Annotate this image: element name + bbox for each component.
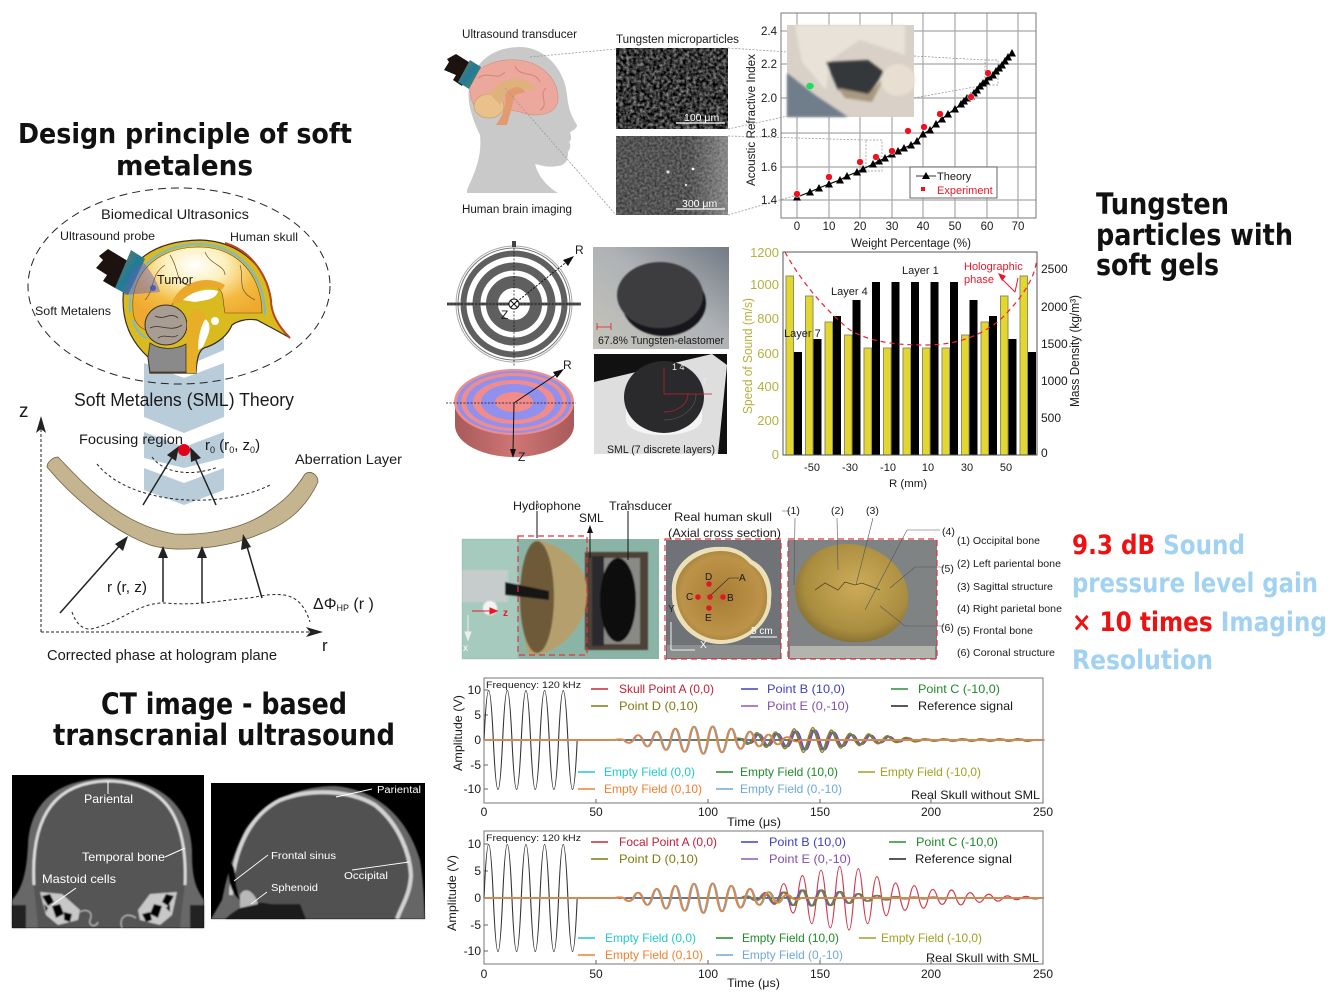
- legend: chart 1: Reference signal: [918, 699, 1013, 713]
- icon: brain: [470, 60, 558, 125]
- labels: lens diagram: HP: [336, 603, 349, 613]
- panel: CT coronal: [12, 775, 204, 928]
- legend: chart 2: Point D (0,10): [619, 852, 698, 866]
- labels: lens diagram: r (r, z): [107, 579, 147, 596]
- leader lines and numbers: (6): [941, 622, 954, 634]
- legend: chart 2: Point E (0,-10): [769, 852, 851, 866]
- axes text: chart 1: -10: [464, 782, 481, 796]
- legend: chart 1: Empty Field (10,0): [740, 765, 838, 779]
- panel: CT coronal: Temporal bone: [82, 850, 165, 864]
- labels: lens diagram: 0: [210, 445, 215, 455]
- list: skull anatomy: (4) Right parietal bone: [957, 603, 1062, 615]
- legend: chart 2: Empty Field (10,0): [742, 931, 839, 945]
- photo inset: [787, 25, 915, 117]
- list: skull anatomy: (5) Frontal bone: [957, 625, 1033, 637]
- panel: head and brain imaging: Human brain imaging: [462, 204, 572, 216]
- layer labels: Holographic: [964, 261, 1023, 273]
- photo: skull axial: X: [700, 640, 707, 651]
- right tick labels: 1500: [1041, 337, 1068, 351]
- layer labels: [784, 261, 1023, 340]
- panel: ring schematic: R: [575, 243, 584, 257]
- panel: CT sagittal: Sphenoid: [271, 883, 318, 894]
- photo: skull axial: D: [705, 572, 712, 583]
- labels: lens diagram: 0: [229, 445, 234, 455]
- chart: skull without SML: [451, 678, 1053, 829]
- labels: brain: Tumor: [157, 272, 194, 287]
- legend: Experiment: [937, 185, 993, 197]
- x tick labels: 30: [961, 462, 973, 474]
- label: real human skull: [668, 510, 781, 540]
- layer labels: Layer 1: [902, 265, 939, 277]
- chart: skull with SML: [445, 831, 1053, 990]
- axes text: chart 1: 250: [1033, 805, 1053, 819]
- layer labels: Layer 7: [784, 328, 821, 340]
- legend: chart 2: Empty Field (-10,0): [881, 931, 982, 945]
- panel: head and brain imaging: [444, 29, 866, 216]
- panel: 3D metalens cylinder: R: [563, 358, 572, 372]
- focal point: [178, 444, 190, 456]
- callout: gain and resolution: 9.3 dB Sound: [1072, 530, 1245, 561]
- x tick labels: [804, 462, 1012, 490]
- title: tungsten particles: [1096, 187, 1293, 282]
- legend: chart 1: Empty Field (0,-10): [740, 782, 842, 796]
- tick labels: 2.2: [761, 59, 777, 71]
- legend: chart 1: Empty Field (0,10): [604, 782, 702, 796]
- axes text: chart 1: 50: [589, 805, 603, 819]
- axes text: chart 1: 10: [468, 683, 481, 697]
- list: skull anatomy: (3) Sagittal structure: [957, 581, 1053, 593]
- arrows to lens: [60, 534, 262, 613]
- photo: tungsten-elastomer: 67.8% Tungsten-elastomer: [598, 335, 724, 347]
- legend: chart 1: Empty Field (0,0): [604, 765, 695, 779]
- legend: chart 1: Point C (-10,0): [918, 682, 1000, 696]
- icon: ultrasound probe: [96, 249, 160, 295]
- dotted zoom boxes: [866, 56, 998, 171]
- leader lines and numbers: (3): [866, 505, 879, 517]
- axes text: chart 2: -5: [470, 918, 481, 932]
- panel: CT sagittal: Occipital: [344, 871, 388, 882]
- axes text: chart 1: 200: [921, 805, 941, 819]
- axes text: chart 1: Time (μs): [727, 815, 781, 829]
- black bars: [794, 282, 1036, 455]
- dashed wavefronts: [72, 457, 310, 629]
- tick labels: 0: [794, 221, 800, 233]
- axis titles: Mass Density (kg/m³): [1067, 295, 1082, 407]
- right tick labels: [1041, 262, 1068, 460]
- labels: lens diagram: Aberration Layer: [295, 451, 402, 467]
- dashed ellipse: [28, 188, 330, 384]
- photo: skull axial: B: [727, 593, 734, 604]
- tick labels: 50: [949, 221, 961, 233]
- legend: chart 1: Skull Point A (0,0): [619, 682, 714, 696]
- title: CT image: transcranial ultrasound: [53, 718, 395, 752]
- photo: skull axial: 5 cm: [751, 626, 773, 637]
- left tick labels: [750, 245, 779, 462]
- axis titles: Weight Percentage (%): [851, 238, 971, 250]
- leader lines and numbers: (1): [787, 505, 800, 517]
- labels: brain: [35, 206, 298, 318]
- legend: chart 1: Real Skull without SML: [911, 788, 1040, 802]
- axes text: chart 2: 100: [698, 967, 718, 981]
- photo: SML 7 layers: 1 4: [672, 362, 685, 372]
- legend: chart 2: Focal Point A (0,0): [619, 835, 717, 849]
- SEM image: 100 um: 100 μm: [684, 112, 719, 124]
- legend: chart 1: Empty Field (-10,0): [880, 765, 981, 779]
- legend: chart 2: Real Skull with SML: [926, 951, 1039, 965]
- callout: gain and resolution: Resolution: [1072, 645, 1213, 676]
- tick labels: 1.8: [761, 128, 777, 140]
- title: CT image: [53, 687, 395, 752]
- callout: gain and resolution: [1072, 530, 1327, 676]
- left tick labels: 800: [757, 311, 779, 326]
- arrow: holographic phase: [998, 273, 1018, 292]
- x tick labels: -50: [804, 462, 820, 474]
- title: CT image: CT image - based: [101, 687, 347, 721]
- tick labels: 70: [1012, 221, 1024, 233]
- photo: experiment setup: x: [463, 643, 468, 654]
- panel: tungsten microparticles: [616, 34, 739, 215]
- chevron arrows: [144, 300, 224, 505]
- chart: speed of sound and density: [740, 245, 1082, 490]
- title: tungsten particles: particles with: [1096, 218, 1293, 252]
- legend: chart 1: Point B (10,0): [767, 682, 845, 696]
- legend: chart 1: Frequency: 120 kHz: [486, 680, 581, 691]
- SEM image: 300 um: [616, 136, 728, 215]
- title: tungsten particles: soft gels: [1096, 248, 1219, 282]
- axes text: chart 2: Time (μs): [727, 976, 780, 990]
- icon: transducer: [444, 54, 481, 89]
- yellow bars: [786, 276, 1028, 455]
- panel: CT coronal: Pariental: [84, 792, 133, 806]
- tick labels: 20: [854, 221, 866, 233]
- photo: SML 7 layers: 7: [702, 377, 707, 387]
- labels: setup arrows: Transducer: [609, 499, 672, 513]
- photo: skull axial: [665, 539, 781, 659]
- experiment series: [794, 70, 991, 197]
- labels: lens diagram: , z: [234, 437, 250, 454]
- axis titles: Speed of Sound (m/s): [740, 298, 755, 414]
- tick labels: 10: [823, 221, 835, 233]
- axes text: chart 2: 250: [1033, 967, 1053, 981]
- arrows to focus: [143, 446, 216, 505]
- layer labels: phase: [964, 274, 994, 286]
- photo: experiment setup: z: [503, 608, 508, 619]
- icon: head silhouette: [467, 47, 577, 193]
- dotted connectors: [505, 48, 866, 215]
- labels: lens diagram: (r: [215, 437, 229, 454]
- tick labels: 1.4: [761, 195, 778, 207]
- axes text: chart 1: 100: [698, 805, 718, 819]
- left tick labels: 1200: [750, 245, 779, 260]
- photo: skull exterior: [788, 539, 937, 659]
- leader lines and numbers: [782, 505, 955, 634]
- leader lines and numbers: (2): [831, 505, 844, 517]
- legend: chart 2: Point B (10,0): [769, 835, 846, 849]
- axes text: chart 2: -10: [464, 944, 481, 958]
- labels: lens diagram: [47, 431, 402, 664]
- tick labels: 40: [917, 221, 929, 233]
- legend: chart 2: Reference signal: [915, 852, 1012, 866]
- legend: Theory: [937, 171, 972, 183]
- holographic phase curve: [785, 252, 1037, 345]
- photo: SML 7 layers: SML (7 discrete layers): [607, 444, 715, 456]
- tick labels: 30: [886, 221, 898, 233]
- reference burst: [484, 690, 577, 790]
- left tick labels: 200: [757, 413, 779, 428]
- right tick labels: 500: [1041, 411, 1061, 425]
- x tick labels: R (mm): [889, 478, 927, 490]
- panel: 3D metalens cylinder: [446, 358, 576, 464]
- axes text: chart 1: 0: [481, 805, 488, 819]
- SEM image: 300 um: 300 μm: [682, 198, 717, 210]
- photo: skull axial: E: [705, 613, 712, 624]
- legend: chart 2: Point C (-10,0): [916, 835, 998, 849]
- panel: 3D metalens cylinder: Z: [518, 450, 525, 464]
- callout: gain and resolution: × 10 times Imaging: [1072, 607, 1327, 638]
- axes text: chart 2: 200: [921, 967, 941, 981]
- axis arrowheads and labels: z: [19, 401, 28, 422]
- axes text: chart 2: 0: [474, 891, 481, 905]
- leader lines and numbers: (5): [941, 563, 954, 575]
- legend: chart 2: Empty Field (0,-10): [742, 948, 843, 962]
- legend: chart 1: [486, 680, 1040, 802]
- ticks: [484, 690, 1043, 803]
- axes text: chart 2: Amplitude (V): [445, 855, 459, 931]
- legend: [910, 167, 997, 198]
- labels: lens diagram: Corrected phase at hologram plane: [47, 648, 277, 664]
- grid: [781, 13, 1036, 218]
- legend: chart 2: [486, 833, 1039, 965]
- labels: brain: Human skull: [230, 230, 298, 244]
- layer labels: Layer 4: [831, 286, 868, 298]
- tick labels: 1.6: [761, 162, 777, 174]
- x tick labels: 50: [1000, 462, 1012, 474]
- icon: brain cross-section: [123, 240, 290, 373]
- signal traces: [484, 726, 1044, 754]
- labels: setup arrows: SML: [579, 511, 604, 525]
- heading: SML theory: Soft Metalens (SML) Theory: [74, 390, 294, 410]
- panel: CT sagittal: Pariental: [377, 785, 421, 796]
- tick labels: 60: [981, 221, 993, 233]
- panel: CT sagittal: [211, 783, 425, 919]
- label: real human skull: Real human skull: [674, 510, 772, 524]
- labels: setup arrows: [513, 499, 672, 560]
- labels: lens diagram: ): [255, 437, 260, 454]
- axis titles: [746, 54, 971, 250]
- axes: [41, 425, 312, 632]
- title: design principle: [18, 117, 352, 182]
- list: skull anatomy: (1) Occipital bone: [957, 535, 1040, 547]
- panel: soft metalens schematic: [19, 188, 402, 664]
- photo: tungsten-elastomer: [593, 247, 729, 349]
- list: skull anatomy: [957, 535, 1062, 659]
- axis titles: [740, 295, 1082, 414]
- labels: lens diagram: Focusing region: [79, 431, 183, 447]
- axes text: chart 1: -5: [470, 758, 481, 772]
- labels: brain: Ultrasound probe: [60, 229, 155, 243]
- labels: lens diagram: ΔΦ: [313, 596, 336, 613]
- SEM image: 100 um: [616, 48, 728, 129]
- panel: ring schematic: [447, 241, 584, 366]
- axes text: chart 2: 50: [589, 967, 603, 981]
- legend: chart 1: Point D (0,10): [619, 699, 698, 713]
- labels: lens diagram: 0: [250, 445, 255, 455]
- axes text: chart 2: 0: [481, 967, 488, 981]
- tick labels: 2.4: [761, 26, 778, 38]
- panel: tungsten microparticles: Tungsten microparticles: [616, 34, 739, 46]
- labels: lens diagram: r: [205, 437, 210, 454]
- title: tungsten particles: Tungsten: [1096, 187, 1229, 221]
- legend: chart 2: Empty Field (0,0): [605, 931, 696, 945]
- panel: CT coronal: Mastoid cells: [42, 872, 116, 886]
- axes text: chart 2: [445, 837, 1053, 990]
- axis arrowheads and labels: [19, 401, 328, 655]
- axes text: chart 1: 0: [474, 733, 481, 747]
- tick labels: [761, 26, 1024, 233]
- reference burst: [484, 844, 577, 952]
- right tick labels: 2500: [1041, 262, 1068, 276]
- x tick labels: -10: [880, 462, 896, 474]
- list: skull anatomy: (2) Left pariental bone: [957, 558, 1061, 570]
- axes text: chart 2: 5: [474, 864, 481, 878]
- right tick labels: 2000: [1041, 300, 1068, 314]
- photo: skull axial: Y: [668, 604, 675, 615]
- lens: aberration layer: [47, 457, 318, 549]
- chart: acoustic refractive index: [746, 13, 1036, 250]
- labels: brain: Biomedical Ultrasonics: [101, 206, 249, 222]
- leader lines and numbers: (4): [942, 526, 955, 538]
- photo: skull axial: C: [686, 592, 693, 603]
- axes text: chart 2: 150: [810, 967, 830, 981]
- labels: head: Ultrasound transducer: [462, 29, 577, 41]
- theory series: [797, 53, 1012, 197]
- x tick labels: 10: [922, 462, 934, 474]
- x tick labels: -30: [842, 462, 858, 474]
- photo: skull axial: A: [739, 573, 746, 584]
- legend: chart 2: Empty Field (0,10): [605, 948, 703, 962]
- title: design principle: Design principle of soft: [18, 117, 352, 150]
- axis arrowheads and labels: r: [322, 636, 328, 655]
- left tick labels: 400: [757, 379, 779, 394]
- left tick labels: 1000: [750, 277, 779, 292]
- right tick labels: 0: [1041, 446, 1048, 460]
- labels: lens diagram: (r ): [349, 596, 374, 613]
- axes text: chart 1: [451, 683, 1053, 829]
- right tick labels: 1000: [1041, 374, 1068, 388]
- axes text: chart 1: 150: [810, 805, 830, 819]
- axes text: chart 1: 5: [474, 708, 481, 722]
- panel: CT sagittal: Frontal sinus: [271, 851, 336, 862]
- left tick labels: 600: [757, 346, 779, 361]
- labels: brain: Soft Metalens: [35, 304, 111, 318]
- labels: setup arrows: Hydrophone: [513, 499, 581, 513]
- title: design principle: metalens: [116, 149, 253, 182]
- axis titles: Acoustic Refractive Index: [746, 54, 758, 186]
- photo: SML 7 layers: [594, 354, 727, 456]
- legend: chart 2: Frequency: 120 kHz: [486, 833, 581, 844]
- axes text: chart 2: 10: [468, 837, 481, 851]
- photo: experiment setup: [462, 536, 659, 659]
- left tick labels: 0: [772, 447, 779, 462]
- axes text: chart 1: Amplitude (V): [451, 695, 465, 771]
- legend: chart 1: Point E (0,-10): [767, 699, 849, 713]
- tick labels: 2.0: [761, 93, 777, 105]
- signal traces: [484, 866, 1044, 930]
- ticks: [484, 844, 1043, 964]
- list: skull anatomy: (6) Coronal structure: [957, 647, 1055, 659]
- label: real human skull: (Axial cross section): [668, 526, 781, 540]
- panel: ring schematic: Z: [501, 308, 508, 322]
